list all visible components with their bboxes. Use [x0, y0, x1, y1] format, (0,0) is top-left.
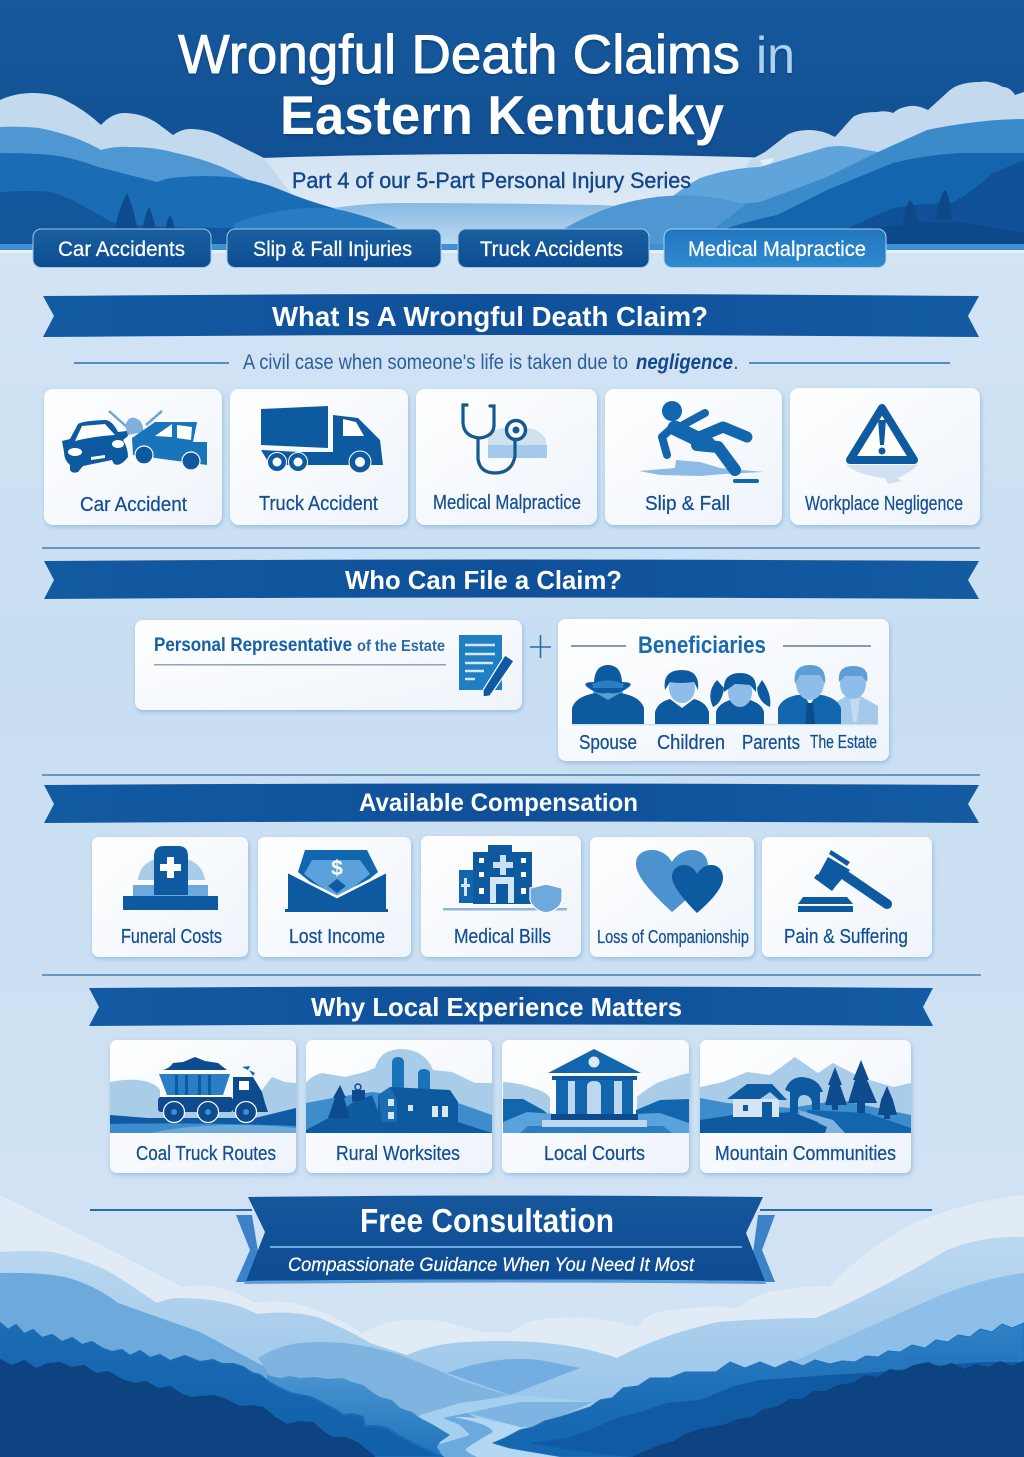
icon: falling person — [639, 401, 764, 483]
cards: local experience — [110, 1040, 911, 1173]
forest layer right — [493, 1323, 1024, 1457]
left dark hill — [0, 153, 392, 252]
footer mountain landscape — [0, 1195, 1024, 1457]
card: workplace negligence: Workplace Negligence — [805, 493, 963, 515]
heading: what is a wrongful death claim — [43, 294, 979, 337]
card: lost income: Lost Income — [289, 926, 385, 948]
tab: car accidents: Car Accidents — [58, 238, 185, 261]
card: mountain communities — [700, 1040, 911, 1173]
card: slip and fall — [605, 389, 782, 525]
icon: child girl — [710, 673, 770, 724]
card: personal representative: of the Estate — [357, 638, 445, 655]
title: Wrongful Death Claims — [178, 23, 740, 85]
cards: claim causes — [44, 388, 980, 525]
forest layer mid-left — [267, 1375, 450, 1457]
cards: compensation — [92, 836, 932, 957]
icon: envelope with money: $ — [331, 857, 343, 880]
icon: document and pen — [459, 635, 514, 697]
left lens hill — [225, 208, 397, 252]
tab: slip and fall: Slip & Fall Injuries — [253, 238, 412, 261]
forest layer left — [0, 1323, 443, 1457]
left darkest hill — [0, 191, 235, 252]
card: beneficiaries: The Estate — [810, 732, 877, 752]
definition text: negligence — [636, 351, 733, 374]
dark forest left — [0, 1360, 374, 1457]
heading: who can file a claim — [44, 560, 979, 599]
card: beneficiaries: Spouse — [579, 732, 637, 754]
mid forest right — [530, 1362, 1024, 1457]
card: beneficiaries: Beneficiaries — [638, 632, 766, 659]
icon: envelope with money — [285, 850, 388, 912]
tab: truck accidents: Truck Accidents — [480, 238, 623, 261]
card: personal representative — [135, 620, 522, 710]
card: truck accident: Truck Accident — [259, 493, 378, 515]
card: loss of companionship: Loss of Companionship — [597, 927, 749, 947]
tab: car accidents — [33, 229, 211, 268]
illustration: mountain village — [700, 1057, 911, 1133]
plus sign — [530, 635, 551, 658]
right light hill — [640, 146, 878, 240]
icon: tombstone — [123, 846, 218, 910]
tab: truck accidents — [458, 229, 649, 268]
illustration: coal truck — [110, 1057, 296, 1133]
icon: man in light suit — [830, 666, 878, 724]
icon: stethoscope — [463, 405, 547, 473]
water under river — [420, 1395, 600, 1457]
card: coal truck routes — [110, 1040, 296, 1173]
card: pain and suffering: Pain & Suffering — [784, 926, 908, 948]
card: lost income — [258, 837, 411, 957]
center hill B — [447, 1359, 580, 1395]
trees left — [115, 193, 175, 230]
footer banner: free consultation: Free Consultation — [360, 1202, 614, 1239]
card: beneficiaries: Children — [657, 732, 725, 754]
card: local courts: Local Courts — [544, 1143, 645, 1165]
title: Eastern Kentucky — [280, 84, 724, 146]
card: rural worksites: Rural Worksites — [336, 1143, 460, 1165]
card: medical bills — [421, 836, 581, 957]
icon: truck — [261, 406, 383, 473]
card: beneficiaries — [558, 619, 889, 761]
heading: available compensation: Available Compensation — [359, 789, 638, 817]
center hill A — [258, 1342, 507, 1440]
heading: why local experience matters: Why Local Experience Matters — [311, 992, 682, 1022]
icon: warning triangle — [846, 408, 918, 484]
card: beneficiaries: Parents — [742, 732, 800, 754]
card: slip and fall: Slip & Fall — [645, 493, 730, 515]
card: medical malpractice — [416, 389, 597, 525]
card: medical bills: Medical Bills — [454, 926, 551, 948]
definition text: A civil case when someone's life is taken due to — [243, 351, 628, 374]
icon: two hearts — [636, 850, 723, 913]
definition text: . — [733, 351, 739, 374]
footer banner: free consultation — [90, 1196, 932, 1284]
icon: car crash — [62, 411, 207, 473]
tab: slip and fall — [227, 229, 441, 268]
subtitle: Part 4 of our 5-Part Personal Injury Series — [292, 168, 691, 193]
medium side hills — [0, 1273, 440, 1457]
navigation tabs — [33, 229, 886, 268]
heading: available compensation — [44, 784, 979, 823]
footer banner: free consultation: Compassionate Guidance When You Need It Most — [288, 1255, 695, 1276]
title: in — [756, 27, 795, 85]
tab: medical malpractice: Medical Malpractice — [688, 238, 866, 261]
trees right — [903, 190, 952, 225]
card: rural worksites — [306, 1040, 492, 1173]
card: loss of companionship — [590, 837, 754, 957]
definition text — [74, 351, 950, 374]
icon: man in dark suit — [778, 665, 841, 724]
illustration: rural worksite — [306, 1049, 492, 1133]
center hill — [333, 203, 640, 252]
icon: hospital — [443, 845, 567, 913]
card: car accident: Car Accident — [80, 494, 187, 516]
horizon band — [0, 244, 1024, 250]
left medium hill — [0, 127, 400, 252]
river — [455, 1417, 563, 1457]
tab: medical malpractice — [664, 229, 886, 268]
right medium hill — [565, 119, 1024, 252]
header mountain scene — [0, 0, 1024, 253]
card: mountain communities: Mountain Communities — [715, 1143, 896, 1165]
card: funeral costs — [92, 837, 248, 957]
icon: child boy — [655, 670, 709, 724]
pale hills — [0, 1237, 1024, 1457]
card: medical malpractice: Medical Malpractice — [433, 492, 581, 514]
title — [178, 23, 795, 146]
card: workplace negligence — [790, 388, 980, 525]
illustration: courthouse — [503, 1049, 689, 1133]
right darkest hill — [830, 160, 1024, 252]
dark forest right — [634, 1362, 1024, 1457]
card: pain and suffering — [762, 837, 932, 957]
heading: why local experience matters — [89, 986, 933, 1026]
icon: gavel — [798, 850, 887, 912]
card: personal representative: Personal Representative — [154, 635, 352, 656]
card: funeral costs: Funeral Costs — [121, 926, 222, 948]
icon: spouse — [572, 665, 644, 724]
card: truck accident — [230, 389, 408, 525]
heading: what is a wrongful death claim: What Is A Wrongful Death Claim? — [272, 301, 708, 332]
heading: who can file a claim: Who Can File a Claim? — [345, 565, 622, 595]
card: local courts — [502, 1040, 689, 1173]
card: coal truck routes: Coal Truck Routes — [136, 1143, 276, 1165]
card: car accident — [44, 389, 222, 525]
